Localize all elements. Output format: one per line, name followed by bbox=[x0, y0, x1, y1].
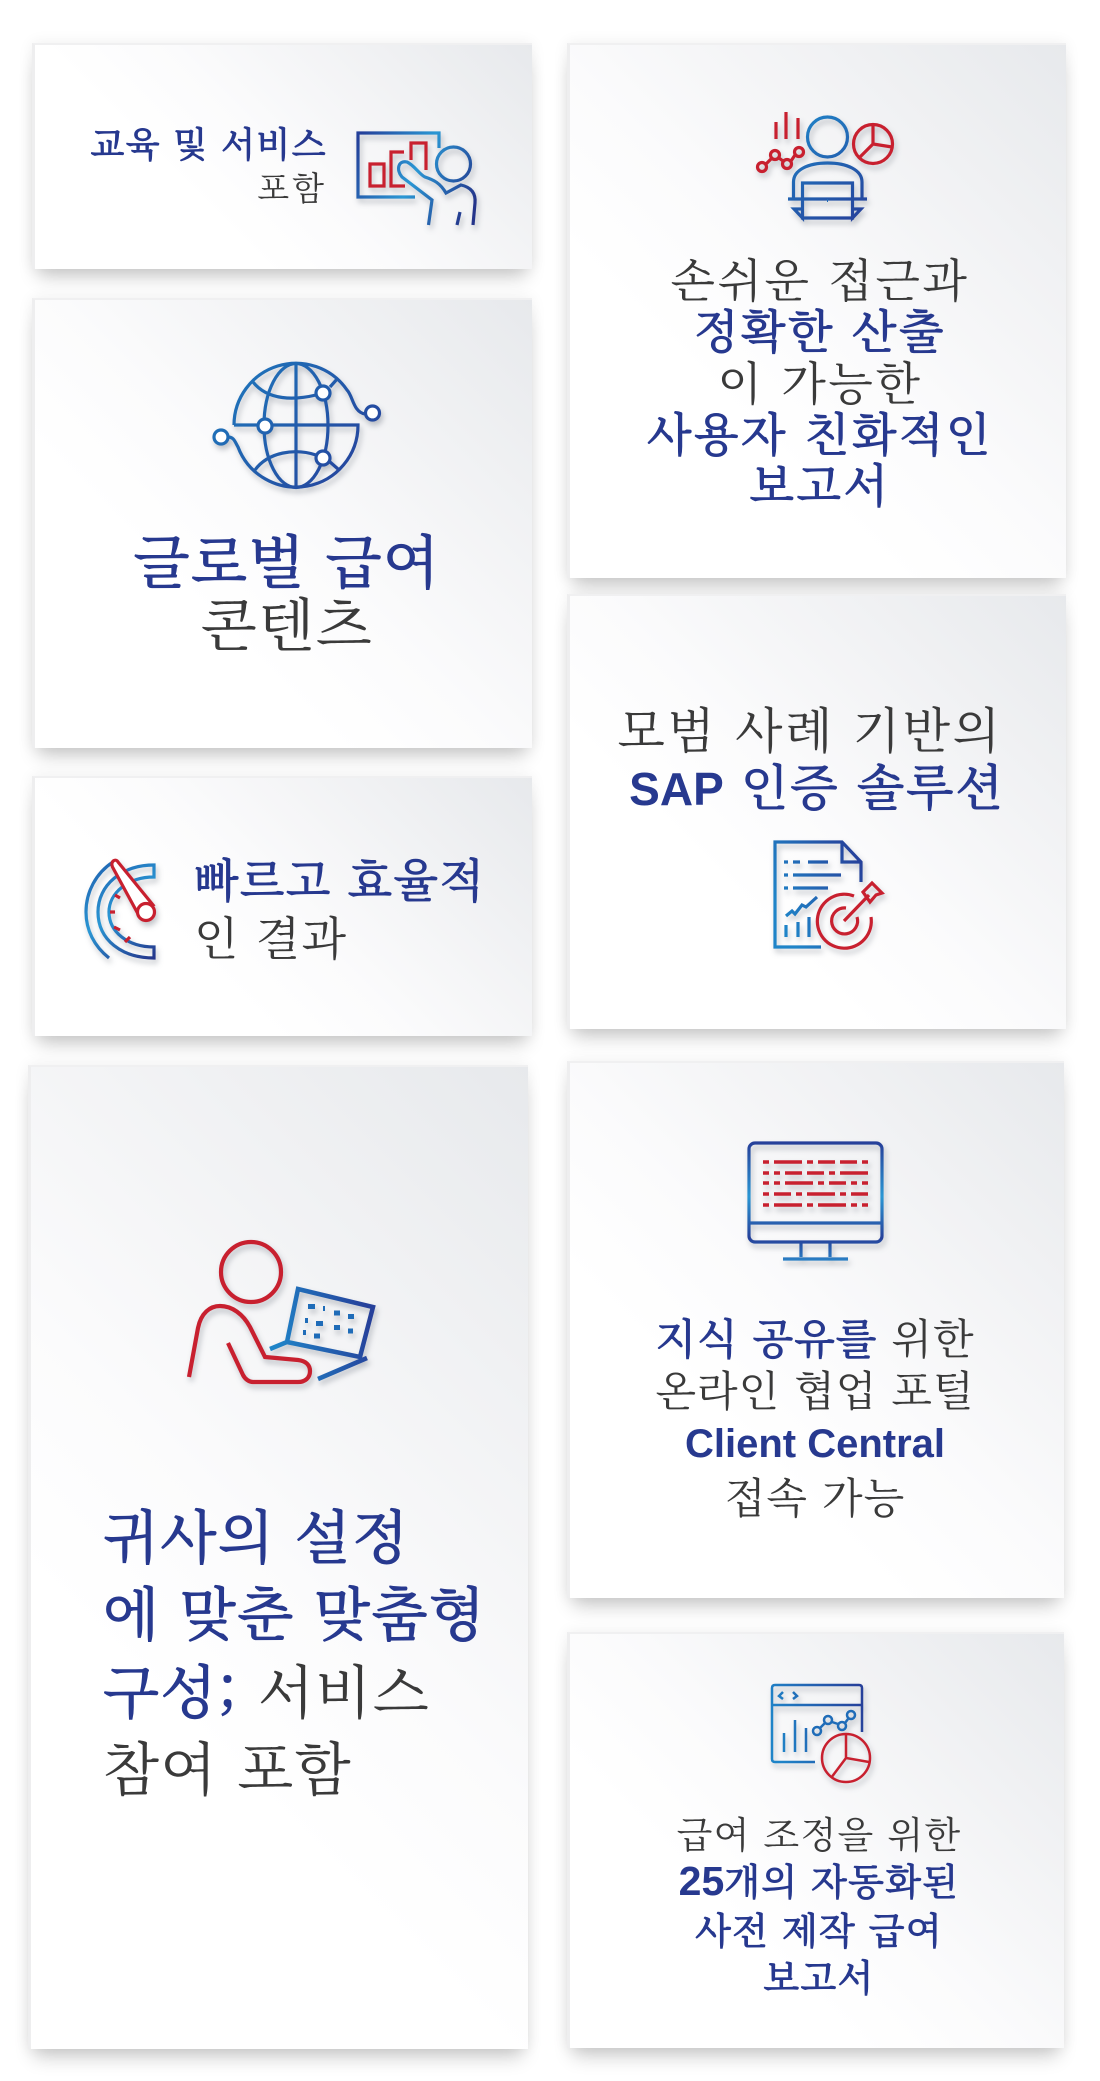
heading: Client Central portal: Client Central bbox=[685, 1422, 945, 1466]
panel: automated payroll reports bbox=[567, 1632, 1064, 2048]
heading: global payroll content: 콘텐츠 bbox=[201, 579, 373, 663]
heading: global payroll content: 글로벌 급여 bbox=[133, 516, 441, 600]
heading: Client Central portal: 온라인 협업 포털 bbox=[655, 1358, 975, 1418]
panel: fast and efficient results bbox=[32, 776, 532, 1036]
heading: easy access and accurate output: 손쉬운 접근과 bbox=[670, 245, 970, 311]
icon: presenter at chart board bbox=[356, 131, 482, 230]
heading: easy access and accurate output: 정확한 산출 bbox=[694, 296, 946, 362]
heading: fast and efficient results bbox=[194, 845, 485, 969]
panel: easy access reports bbox=[567, 43, 1066, 578]
heading: fast and efficient results: 인 결과 bbox=[194, 903, 348, 969]
icon: document with target bbox=[772, 840, 888, 956]
heading: custom configuration for your setup: 에 맞춘 맞춤형 bbox=[103, 1568, 486, 1652]
heading: education and services included: 포함 bbox=[257, 163, 327, 210]
panel: education and services bbox=[32, 43, 532, 269]
heading: Client Central portal: 지식 공유를 위한 bbox=[655, 1307, 975, 1367]
heading: education and services included: 교육 및 서비스 bbox=[90, 118, 327, 168]
heading: Client Central portal bbox=[655, 1307, 975, 1526]
heading: 25 automated prebuilt payroll reports: 25개의 자동화된 bbox=[679, 1852, 959, 1906]
heading: global payroll content bbox=[133, 516, 441, 663]
heading: 25 automated prebuilt payroll reports: 급여 조정을 위한 bbox=[677, 1805, 961, 1859]
heading: best practice SAP certified solution: 모범 사례 기반의 bbox=[617, 693, 1003, 763]
icon: user with laptop and charts bbox=[756, 112, 899, 227]
heading: easy access and accurate output: 사용자 친화적인 bbox=[647, 399, 993, 465]
icon: monitor with code lines bbox=[746, 1141, 888, 1268]
panel: global payroll content bbox=[32, 298, 532, 748]
panel: SAP certified solution bbox=[567, 594, 1066, 1029]
heading: best practice SAP certified solution: SAP 인증 솔루션 bbox=[629, 750, 1005, 820]
heading: custom configuration for your setup: 구성; 서비스 bbox=[103, 1646, 430, 1730]
heading: Client Central portal: 접속 가능 bbox=[725, 1466, 905, 1526]
heading: easy access and accurate output bbox=[647, 245, 993, 516]
heading: 25 automated prebuilt payroll reports: 보고서 bbox=[763, 1948, 875, 2002]
heading: easy access and accurate output: 보고서 bbox=[749, 450, 891, 516]
panel: customised configuration bbox=[28, 1065, 528, 2049]
icon: globe with network nodes bbox=[212, 362, 386, 496]
heading: 25 automated prebuilt payroll reports: 사전 제작 급여 bbox=[695, 1901, 943, 1955]
heading: custom configuration for your setup bbox=[103, 1490, 486, 1807]
heading: education and services included bbox=[90, 118, 327, 210]
icon: window with charts and pie bbox=[770, 1684, 876, 1790]
heading: fast and efficient results: 빠르고 효율적 bbox=[194, 845, 485, 911]
heading: easy access and accurate output: 이 가능한 bbox=[717, 348, 922, 414]
icon: speedometer bbox=[84, 858, 160, 966]
heading: custom configuration for your setup: 귀사의 설정 bbox=[103, 1490, 410, 1574]
heading: best practice SAP certified solution bbox=[617, 693, 1005, 820]
heading: 25 automated prebuilt payroll reports bbox=[677, 1805, 961, 2002]
icon: person at laptop bbox=[186, 1240, 380, 1391]
panel: online collaboration portal bbox=[567, 1061, 1064, 1598]
heading: custom configuration for your setup: 참여 포함 bbox=[103, 1723, 352, 1807]
